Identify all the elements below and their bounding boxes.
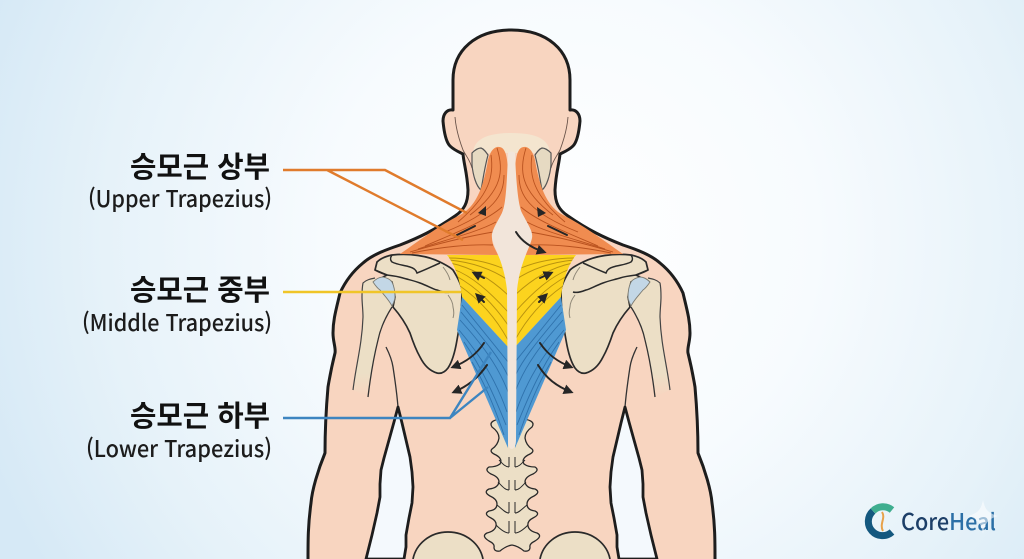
right body half <box>511 30 715 559</box>
label: lower trapezius <box>86 393 272 464</box>
logo mark <box>868 511 892 536</box>
spine left <box>484 418 512 551</box>
upper left arrow <box>457 226 475 235</box>
right trapezius <box>508 140 628 451</box>
left arm gap <box>366 407 413 559</box>
label: upper trapezius <box>88 144 272 214</box>
sparkle <box>968 500 998 534</box>
lower left arrow 1 <box>453 343 484 367</box>
upper leader line <box>283 170 467 240</box>
middle left arrow 1 <box>474 273 484 278</box>
middle left arrow 2 <box>477 295 484 302</box>
label: lower trapezius: 승모근 하부 <box>130 393 270 435</box>
label: lower trapezius: (Lower Trapezius) <box>86 430 272 464</box>
right arm gap <box>610 407 657 559</box>
upper centre arrow <box>516 232 544 252</box>
lower left arrow 2 <box>454 365 487 392</box>
spine right <box>512 418 540 551</box>
label: upper trapezius: (Upper Trapezius) <box>88 180 272 214</box>
label: upper trapezius: 승모근 상부 <box>130 144 270 186</box>
upper right arrowhead <box>537 207 546 217</box>
label: middle trapezius <box>82 267 272 338</box>
left body half <box>308 30 512 559</box>
middle right arrow 2 <box>539 295 546 302</box>
label: middle trapezius: 승모근 중부 <box>130 267 270 309</box>
logo wordmark: CoreHeal <box>901 503 996 537</box>
upper right arrow <box>548 226 567 235</box>
label: middle trapezius: (Middle Trapezius) <box>82 304 272 338</box>
lower right arrow 1 <box>540 343 571 367</box>
left trapezius <box>395 140 515 451</box>
upper left arrowhead <box>478 206 486 216</box>
logo spine <box>882 512 883 531</box>
middle right arrow 1 <box>540 273 551 278</box>
middle leader line <box>283 291 462 293</box>
lower right arrow 2 <box>538 365 571 392</box>
logo <box>868 500 998 537</box>
lower leader line <box>283 352 491 418</box>
logo accent <box>873 507 892 511</box>
muscle direction arrows <box>453 206 571 392</box>
central tendon strip <box>492 152 532 449</box>
